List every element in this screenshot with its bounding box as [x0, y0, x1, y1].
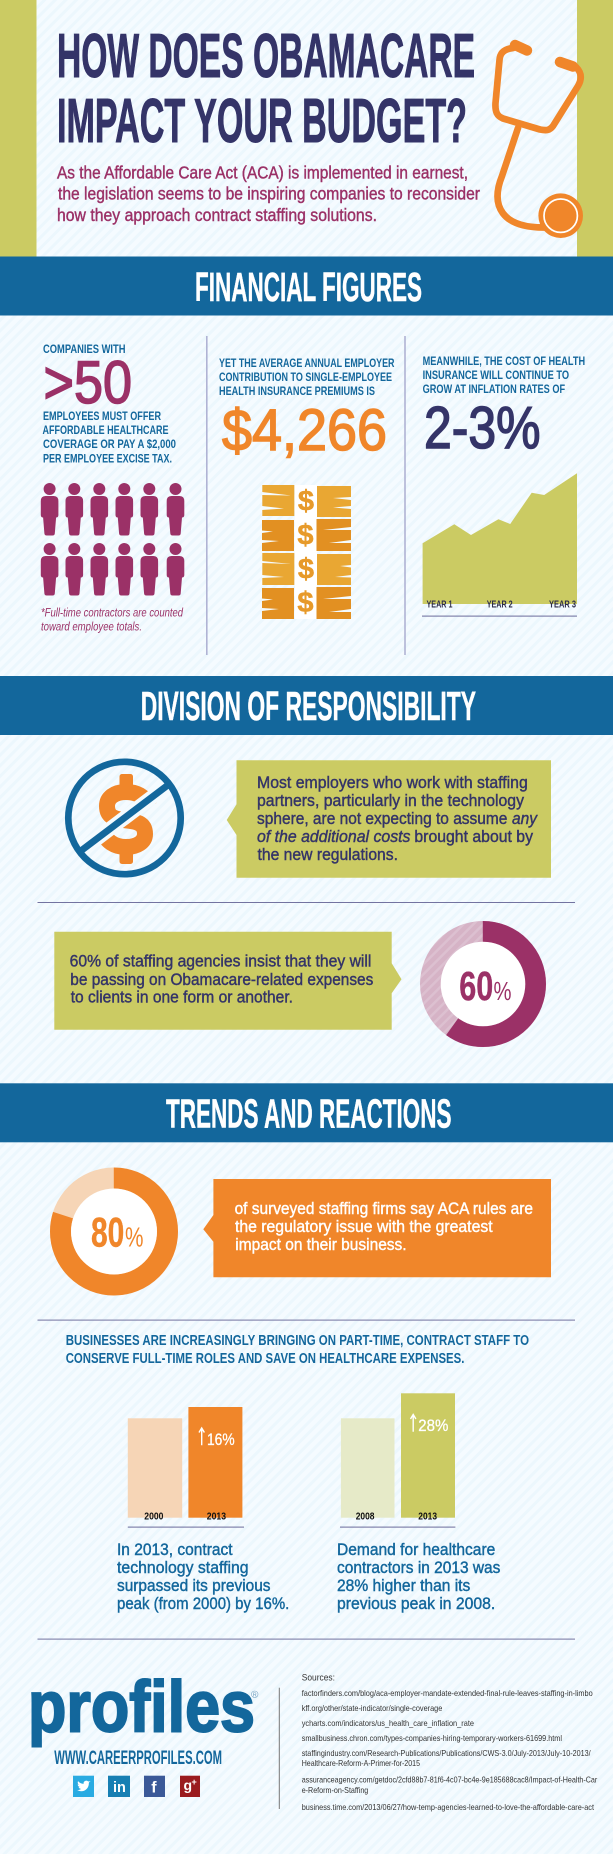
- callout: employers: sphere, are not expecting to assume: [257, 810, 507, 828]
- icon: linkedin: [108, 1776, 130, 1797]
- icon: facebook: [144, 1776, 165, 1797]
- icon: stacks of money: $: [298, 486, 314, 518]
- callout: staffing agencies: be passing on Obamacare-related expenses: [70, 971, 373, 989]
- section band: division of responsibility: [0, 676, 613, 735]
- text body: EMPLOYEES MUST OFFER: [43, 410, 161, 423]
- icon: linkedin: in: [113, 1780, 126, 1796]
- panel: cost of health insurance: [422, 355, 585, 617]
- section band: trends and reactions: [0, 1083, 613, 1142]
- bar chart: 2000 vs 2013: 2013: [207, 1511, 226, 1523]
- sources list: Sources:: [302, 1673, 335, 1684]
- callout: staffing agencies: [54, 932, 402, 1030]
- donut chart: 80%: %: [125, 1222, 144, 1253]
- callout: employers: [227, 760, 551, 878]
- website url: WWW.CAREERPROFILES.COM: [54, 1748, 222, 1769]
- area chart: YEAR 2: [487, 598, 513, 610]
- text: Demand for healthcare: [337, 1541, 495, 1559]
- callout: employers: Most employers who work with staffing: [257, 774, 528, 792]
- callout: surveyed firms: the regulatory issue with the greatest: [235, 1218, 493, 1236]
- icon: stacks of money: [262, 485, 351, 619]
- text lead: [423, 355, 585, 396]
- icon: google plus: [180, 1776, 200, 1797]
- panel: average employer contribution: [219, 357, 395, 619]
- callout: employers: of the additional costs: [257, 828, 410, 846]
- footnote: [41, 608, 183, 634]
- header panel: [0, 0, 613, 257]
- title: [57, 22, 475, 156]
- text: surpassed its previous: [117, 1577, 270, 1595]
- intro text: how they approach contract staffing solutions.: [57, 205, 377, 225]
- number: 2-3%: 2-3%: [424, 394, 541, 461]
- icon: twitter: [73, 1776, 94, 1797]
- panel: companies with more than 50 employees: [41, 343, 184, 634]
- text: [337, 1541, 500, 1613]
- sources list: e-Reform-on-Staffing: [302, 1785, 369, 1795]
- text: part-time contract staff statement: [66, 1333, 529, 1367]
- intro text: the legislation seems to be inspiring companies to reconsider: [58, 184, 480, 204]
- bar chart: 2000 vs 2013: 2000: [144, 1511, 164, 1523]
- callout: surveyed firms: of surveyed staffing firms say ACA rules are: [235, 1200, 533, 1218]
- icon: no dollar sign: [68, 762, 181, 874]
- logo: profiles: R: [253, 1692, 257, 1698]
- sources list: ycharts.com/indicators/us_health_care_inflation_rate: [302, 1718, 474, 1728]
- callout: surveyed firms: [203, 1179, 551, 1277]
- footnote: toward employee totals.: [41, 622, 142, 634]
- panel: technology staffing: [117, 1407, 289, 1613]
- text: 28% higher than its: [337, 1577, 470, 1595]
- callout: employers: partners, particularly in the technology: [257, 792, 525, 810]
- donut chart: 60%: [420, 921, 546, 1047]
- panel: healthcare contractors: [337, 1393, 500, 1613]
- icon: stacks of money: $: [297, 520, 314, 552]
- callout: surveyed firms: impact on their business.: [235, 1236, 407, 1254]
- text body: [42, 410, 176, 466]
- section band: financial figures: [0, 256, 613, 316]
- icon: stacks of money: $: [297, 587, 314, 619]
- bar chart: 2000 vs 2013: [128, 1407, 244, 1528]
- icon: google plus: g: [184, 1777, 192, 1793]
- callout: employers: brought about by: [414, 828, 534, 846]
- text: [117, 1541, 289, 1613]
- text lead: HEALTH INSURANCE PREMIUMS IS: [219, 385, 375, 398]
- footnote: *Full-time contractors are counted: [41, 608, 183, 620]
- icon: facebook: f: [151, 1780, 157, 1796]
- number: >50: >50: [44, 349, 132, 416]
- text lead: INSURANCE WILL CONTINUE TO: [423, 369, 569, 382]
- callout: staffing agencies: to clients in one form or another.: [71, 989, 293, 1007]
- text lead: GROW AT INFLATION RATES OF: [423, 383, 565, 396]
- callout: employers: the new regulations.: [258, 846, 398, 864]
- sources list: smallbusiness.chron.com/types-companies-hiring-temporary-workers-61699.html: [302, 1733, 562, 1743]
- text: peak (from 2000) by 16%.: [117, 1595, 289, 1613]
- icon: grid of people: [41, 483, 184, 596]
- callout: staffing agencies: 60% of staffing agencies insist that they will: [70, 953, 371, 971]
- bar chart: 2008 vs 2013: [340, 1393, 455, 1528]
- text body: AFFORDABLE HEALTHCARE: [42, 424, 169, 437]
- icon: google plus: +: [192, 1777, 197, 1787]
- bar chart: 2008 vs 2013: 28%: [418, 1416, 448, 1435]
- number: $4,266: $4,266: [222, 398, 387, 463]
- icon: stacks of money: $: [298, 554, 314, 586]
- text: part-time contract staff statement: CONSERVE FULL-TIME ROLES AND SAVE ON HEALTHCARE EXPENSES.: [66, 1351, 464, 1367]
- logo: profiles: profiles: [28, 1668, 255, 1748]
- text lead: COMPANIES WITH: [43, 343, 126, 356]
- sources list: [302, 1673, 597, 1812]
- text: technology staffing: [117, 1559, 249, 1577]
- heading: FINANCIAL FIGURES: [195, 264, 422, 310]
- area chart: YEAR 1: [426, 598, 453, 610]
- text lead: [219, 357, 395, 398]
- donut chart: 80%: [50, 1168, 178, 1296]
- olive side bars: [0, 0, 613, 257]
- text lead: CONTRIBUTION TO SINGLE-EMPLOYEE: [219, 371, 392, 384]
- text body: COVERAGE OR PAY A $2,000: [43, 438, 176, 451]
- callout: employers: any: [512, 810, 539, 828]
- intro text: As the Affordable Care Act (ACA) is implemented in earnest,: [57, 162, 468, 182]
- bar chart: 2008 vs 2013: 2013: [418, 1511, 437, 1523]
- sources list: kff.org/other/state-indicator/single-coverage: [302, 1703, 443, 1713]
- sources list: Healthcare-Reform-A-Primer-for-2015: [302, 1758, 420, 1768]
- text body: PER EMPLOYEE EXCISE TAX.: [43, 453, 172, 466]
- text: previous peak in 2008.: [337, 1595, 495, 1613]
- bar chart: 2000 vs 2013: 16%: [207, 1430, 235, 1449]
- donut chart: 80%: 80: [91, 1209, 124, 1256]
- area chart: YEAR 3: [549, 598, 576, 610]
- text lead: YET THE AVERAGE ANNUAL EMPLOYER: [219, 357, 395, 370]
- donut chart: 60%: 60: [459, 963, 493, 1009]
- donut chart: 60%: %: [494, 976, 512, 1006]
- area chart: [422, 473, 577, 617]
- icon: stethoscope: [495, 45, 583, 238]
- text: In 2013, contract: [117, 1541, 233, 1559]
- text: contractors in 2013 was: [337, 1559, 500, 1577]
- intro text: [57, 162, 480, 225]
- bar chart: 2008 vs 2013: 2008: [356, 1511, 375, 1523]
